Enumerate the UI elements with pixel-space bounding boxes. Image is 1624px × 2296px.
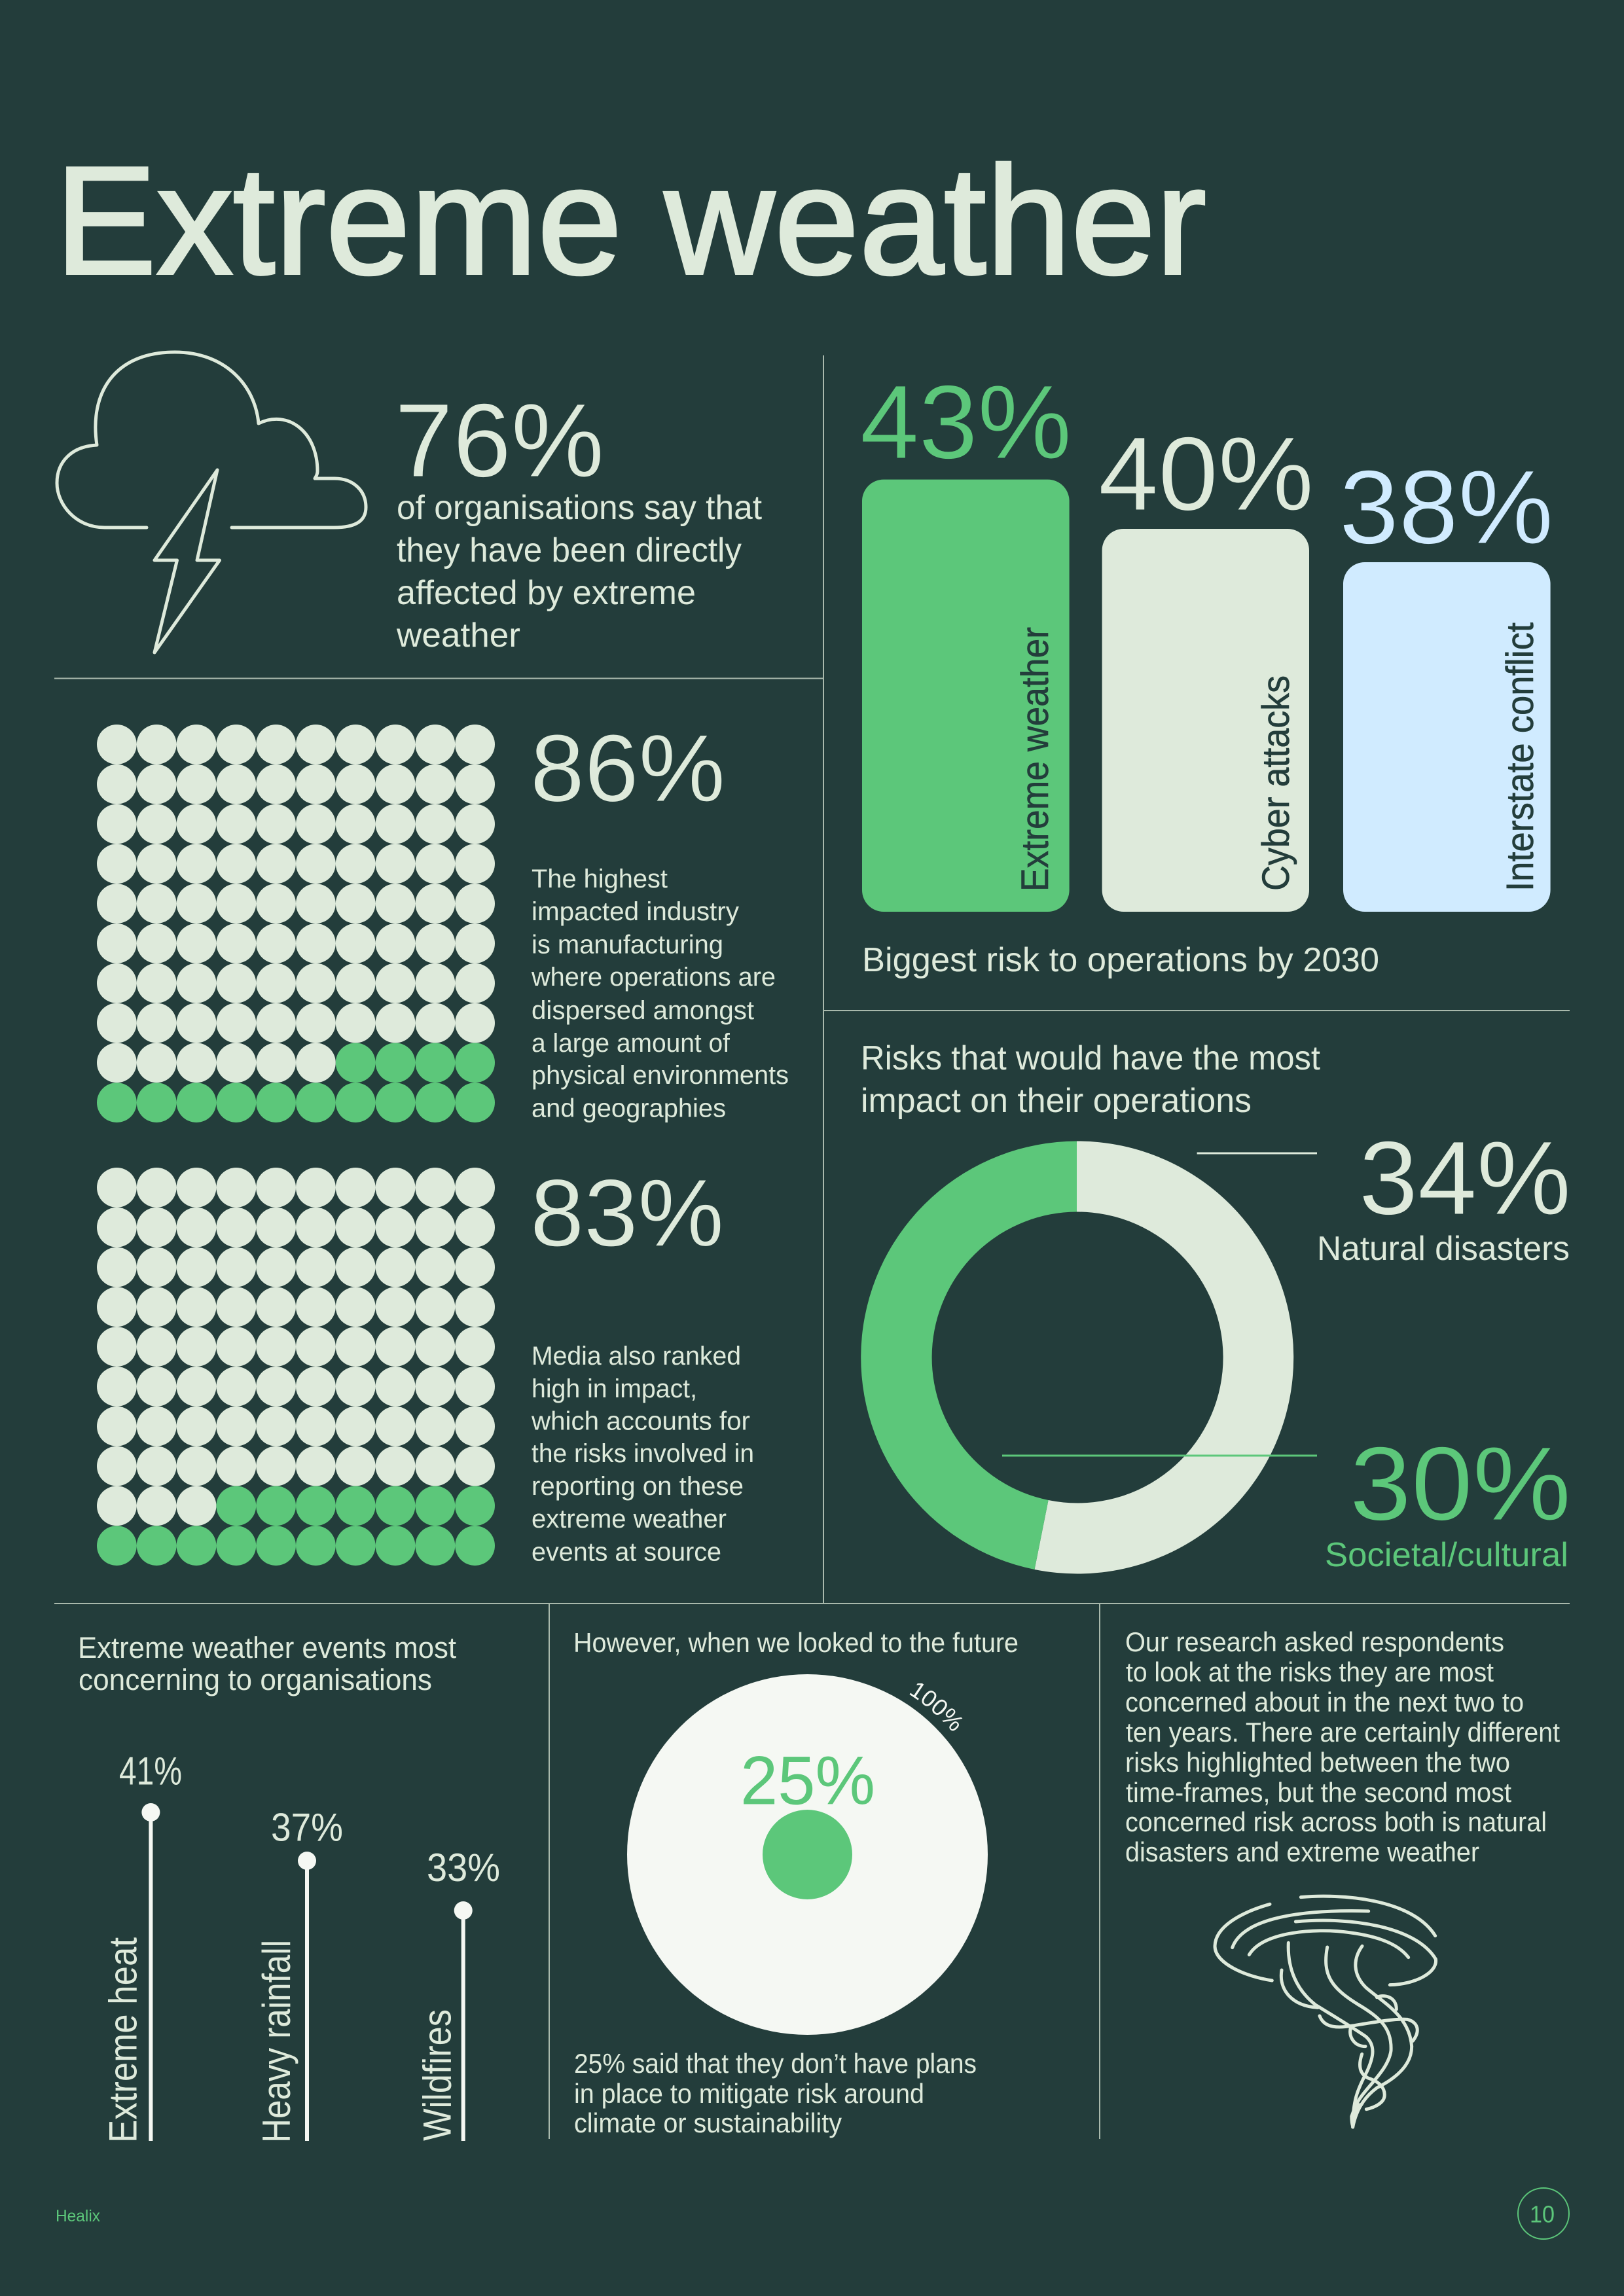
text: research summary: time-frames, but the second most bbox=[1126, 1777, 1511, 1808]
bar: interstate conflict bbox=[1343, 562, 1551, 912]
label: 100% on arc: 100% bbox=[910, 1683, 962, 1731]
text: manufacturing description: The highest bbox=[532, 865, 668, 893]
lollipop: heavy rainfall 37%: Heavy rainfall bbox=[255, 1940, 298, 2143]
lollipop: extreme heat 41% bbox=[101, 1749, 182, 2143]
footer brand: Healix bbox=[56, 2207, 100, 2225]
text: manufacturing description: where operations are bbox=[531, 963, 776, 992]
lollipop: extreme heat 41%: Extreme heat bbox=[101, 1937, 145, 2143]
text: manufacturing description: is manufacturing bbox=[532, 931, 723, 960]
text: organisations affected: weather bbox=[396, 617, 520, 655]
text: media description: Media also ranked bbox=[532, 1342, 741, 1371]
page number: 10 bbox=[1530, 2201, 1555, 2228]
lollipop: wildfires 33%: 33% bbox=[427, 1846, 500, 1890]
chart: dot grid 83 of 100 bbox=[117, 1187, 475, 1546]
icon: storm cloud with lightning bolt bbox=[57, 352, 366, 653]
text: manufacturing description: a large amount of bbox=[532, 1029, 731, 1058]
text: mitigation plans: 25% said that they don’t have plans bbox=[574, 2048, 977, 2079]
text: media description: extreme weather bbox=[532, 1505, 727, 1534]
bar: cyber attacks: Cyber attacks bbox=[1255, 675, 1297, 891]
chart caption: Biggest risk to operations by 2030 bbox=[862, 941, 1379, 979]
stat: 43%: 43% bbox=[860, 363, 1072, 480]
label: societal/cultural: Societal/cultural bbox=[1325, 1536, 1568, 1574]
heading: impact on their operations bbox=[861, 1082, 1252, 1120]
text: media description: reporting on these bbox=[532, 1472, 744, 1501]
text: media description: events at source bbox=[532, 1537, 721, 1566]
heading bbox=[78, 1631, 456, 1696]
text: research summary: concerned about in the next two to bbox=[1125, 1687, 1524, 1717]
stat: 86%: 86% bbox=[530, 715, 725, 821]
text: media description: high in impact, bbox=[532, 1374, 697, 1403]
lollipop: wildfires 33% bbox=[415, 1846, 500, 2141]
title: Extreme weather bbox=[55, 134, 1206, 306]
text: mitigation plans: climate or sustainability bbox=[574, 2108, 842, 2138]
text: manufacturing description bbox=[531, 865, 789, 1123]
text: research summary: to look at the risks they are most bbox=[1126, 1657, 1494, 1687]
text: research summary: ten years. There are certainly different bbox=[1126, 1717, 1560, 1748]
text: mitigation plans: in place to mitigate risk around bbox=[574, 2078, 924, 2109]
stat: 38%: 38% bbox=[1339, 448, 1553, 565]
heading: concerning to organisations bbox=[79, 1663, 432, 1696]
lollipop: heavy rainfall 37%: 37% bbox=[271, 1806, 343, 1850]
lollipop: extreme heat 41%: 41% bbox=[119, 1749, 182, 1793]
chart: donut bbox=[861, 1141, 1293, 1573]
stat: 76%: 76% bbox=[395, 382, 604, 499]
text: research summary: Our research asked respondents bbox=[1125, 1626, 1504, 1657]
panel: 86 percent manufacturing bbox=[117, 715, 789, 1123]
panel: research text bbox=[1125, 1626, 1560, 2128]
text: research summary: concerned risk across both is natural bbox=[1125, 1806, 1547, 1837]
heading: Risks that would have the most bbox=[861, 1039, 1321, 1077]
text: manufacturing description: and geographies bbox=[532, 1094, 726, 1123]
stat: 30%: 30% bbox=[1350, 1425, 1571, 1542]
text: organisations affected: they have been directly bbox=[397, 531, 742, 569]
text: organisations affected: of organisations say that bbox=[397, 489, 763, 527]
stat: 34%: 34% bbox=[1359, 1119, 1571, 1236]
icon: tornado bbox=[1215, 1896, 1436, 2128]
text: manufacturing description: dispersed amongst bbox=[532, 996, 754, 1025]
lollipop: heavy rainfall 37% bbox=[255, 1806, 343, 2143]
text: manufacturing description: physical environments bbox=[532, 1061, 789, 1090]
stat: 83%: 83% bbox=[530, 1160, 724, 1266]
bar: interstate conflict: Interstate conflict bbox=[1499, 622, 1542, 891]
leader line: societal/cultural bbox=[1002, 1454, 1317, 1457]
text: media description: which accounts for bbox=[531, 1407, 750, 1436]
label: natural disasters: Natural disasters bbox=[1317, 1230, 1570, 1268]
text: research summary: disasters and extreme weather bbox=[1125, 1837, 1479, 1867]
text: research summary bbox=[1125, 1626, 1560, 1867]
heading bbox=[861, 1039, 1321, 1120]
stat: 40%: 40% bbox=[1098, 415, 1314, 532]
bar: extreme weather bbox=[862, 480, 1070, 912]
panel: future plans bbox=[573, 1627, 1019, 2138]
text: organisations affected bbox=[396, 489, 763, 655]
heading: However, when we looked to the future bbox=[573, 1627, 1019, 1658]
text: organisations affected: affected by extreme bbox=[397, 574, 696, 612]
panel: biggest risk bar chart bbox=[860, 363, 1553, 979]
text: mitigation plans bbox=[574, 2048, 977, 2138]
text: media description: the risks involved in bbox=[532, 1439, 754, 1468]
lollipop: wildfires 33%: Wildfires bbox=[415, 2009, 460, 2141]
bar: cyber attacks bbox=[1102, 529, 1309, 912]
page number bbox=[1518, 2188, 1569, 2239]
chart: dot grid 86 of 100 bbox=[117, 744, 475, 1103]
text: media description bbox=[531, 1342, 754, 1566]
heading: Extreme weather events most bbox=[78, 1631, 456, 1664]
leader line: natural disasters bbox=[1197, 1152, 1317, 1155]
panel: 83 percent media bbox=[117, 1160, 754, 1566]
panel: 76 percent affected bbox=[57, 352, 763, 655]
text: manufacturing description: impacted industry bbox=[532, 897, 739, 926]
text: research summary: risks highlighted between the two bbox=[1125, 1747, 1510, 1778]
chart: circle 25% bbox=[763, 1810, 852, 1899]
panel: weather events lollipop chart bbox=[78, 1631, 500, 2143]
stat: 25%: 25% bbox=[740, 1742, 875, 1820]
panel: risks with most impact bbox=[861, 1039, 1571, 1574]
bar: extreme weather: Extreme weather bbox=[1014, 627, 1056, 891]
chart: circle 100% bbox=[627, 1674, 988, 2035]
